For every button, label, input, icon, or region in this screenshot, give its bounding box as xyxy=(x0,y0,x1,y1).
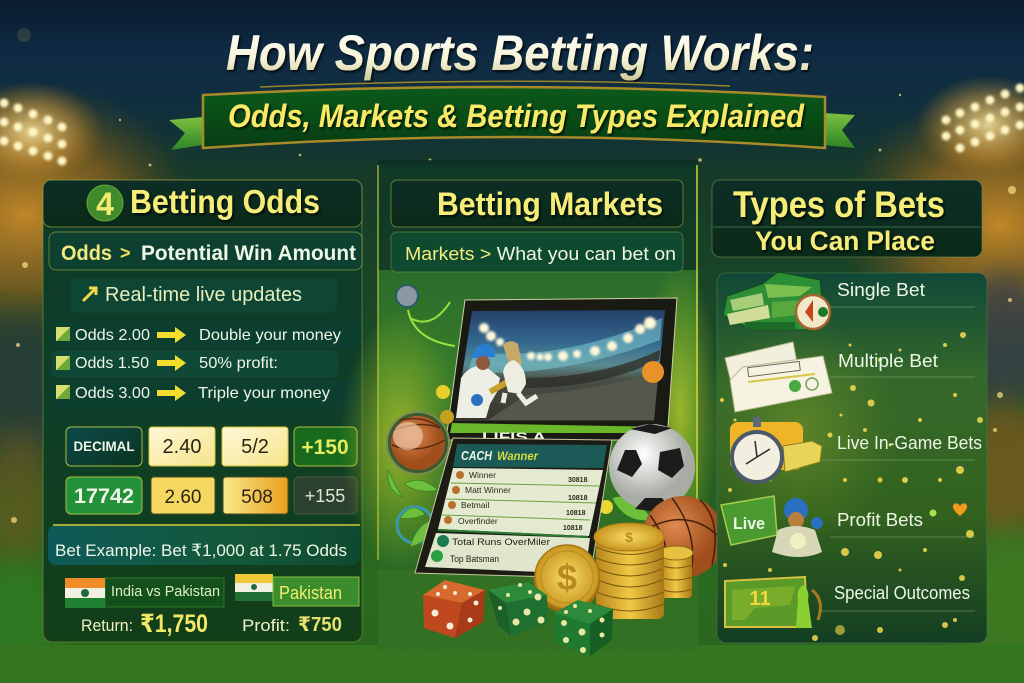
bet type: live in-game bets: Live In-Game Bets xyxy=(837,433,982,453)
ribbon banner with subtitle xyxy=(169,81,855,150)
odds row 2.00: Odds 2.00 xyxy=(75,327,150,344)
odds chips top row: 2.40 xyxy=(163,436,201,458)
red die xyxy=(423,580,485,638)
odds chips top row: +150 xyxy=(301,436,349,459)
basketball xyxy=(642,496,724,578)
match label Pakistan: Pakistan xyxy=(279,583,342,603)
odds row 2.00 xyxy=(52,322,358,348)
green die front xyxy=(554,600,613,656)
yellow dots and blue ring xyxy=(397,385,613,543)
odds chips top row xyxy=(66,427,357,466)
betting slip tablet: Top Batsman xyxy=(450,554,499,565)
return value xyxy=(81,610,208,638)
bet example xyxy=(48,525,360,565)
match label India vs Pakistan: India vs Pakistan xyxy=(111,584,220,600)
live updates row xyxy=(70,278,337,313)
odds chips bottom row xyxy=(66,477,357,514)
bet example: Bet Example: Bet ₹1,000 at 1.75 Odds xyxy=(55,541,347,560)
odds chips bottom row: 2.60 xyxy=(165,487,201,508)
odds chips bottom row: 508 xyxy=(241,487,273,508)
profit value xyxy=(242,614,342,636)
odds definition row: Potential Win Amount xyxy=(141,242,356,265)
types heading: Types of Bets xyxy=(733,184,945,225)
title: How Sports Betting Works: xyxy=(226,25,814,81)
green die xyxy=(488,582,548,636)
panel: types of bets xyxy=(700,180,987,643)
betting slip tablet: 10818 xyxy=(566,510,586,517)
betting slip tablet: Matt Winner xyxy=(465,485,511,495)
return value: Return: xyxy=(81,616,133,635)
odds chips bottom row: +155 xyxy=(305,486,345,506)
betting slip tablet: Winner xyxy=(469,470,496,480)
bet type: single bet xyxy=(723,272,975,330)
betting slip tablet: 10818 xyxy=(563,525,583,532)
betting slip tablet: Wanner xyxy=(497,449,539,463)
profit value: ₹750 xyxy=(298,614,342,636)
markets definition row: Markets > What you can bet on xyxy=(405,244,676,264)
panel: betting markets xyxy=(340,160,724,656)
soccer ball xyxy=(609,424,695,511)
bet type: special outcomes: 11 xyxy=(749,588,771,610)
profit value: Profit: xyxy=(242,616,290,635)
big dollar coin xyxy=(534,545,600,613)
bet type: profit bets: Profit Bets xyxy=(837,510,923,530)
emoji badge xyxy=(642,361,664,383)
bet type: multiple bet xyxy=(725,342,975,412)
stadium lights left xyxy=(0,82,104,182)
odds row 3.00 xyxy=(52,380,358,408)
odds row 2.00: Double your money xyxy=(199,327,341,344)
types heading xyxy=(712,180,982,257)
betting slip tablet: CACH xyxy=(461,448,492,463)
odds heading xyxy=(43,180,362,227)
clipped screen caption: LIFIS A xyxy=(482,430,547,444)
big dollar coin: $ xyxy=(557,557,577,598)
odds heading: Betting Odds xyxy=(130,183,320,220)
ribbon banner with subtitle: Odds, Markets & Betting Types Explained xyxy=(228,98,805,134)
small basketball xyxy=(387,412,449,474)
icon: microphone with vine xyxy=(396,285,455,346)
panel: betting odds xyxy=(43,180,362,642)
odds row 1.50: Odds 1.50 xyxy=(75,355,149,372)
leaves xyxy=(388,470,652,547)
live updates row: Real-time live updates xyxy=(105,284,302,306)
bet type: profit bets xyxy=(721,496,975,557)
tablet with live match xyxy=(446,298,677,444)
odds row 3.00: Odds 3.00 xyxy=(75,385,150,402)
match label India vs Pakistan xyxy=(65,578,224,608)
stadium lights right xyxy=(916,75,1024,175)
betting slip tablet xyxy=(415,438,612,578)
bet type: live in-game bets xyxy=(730,417,982,482)
cricket players xyxy=(456,341,537,418)
odds row 1.50: 50% profit: xyxy=(199,355,278,372)
markets heading: Betting Markets xyxy=(437,186,663,222)
betting slip tablet: 10818 xyxy=(568,495,588,502)
betting slip tablet: Overfinder xyxy=(458,516,498,526)
odds chips bottom row: 17742 xyxy=(74,485,134,508)
bet type: special outcomes xyxy=(725,577,975,628)
coin stack xyxy=(594,523,664,619)
odds row 3.00: Triple your money xyxy=(198,385,330,402)
odds heading: 4 xyxy=(96,186,114,222)
bet type: multiple bet: Multiple Bet xyxy=(838,351,938,371)
return value: ₹1,750 xyxy=(140,610,208,638)
odds chips top row: DECIMAL xyxy=(74,438,135,454)
betting slip tablet: 30818 xyxy=(568,477,588,484)
types heading: You Can Place xyxy=(755,226,935,256)
odds chips top row: 5/2 xyxy=(241,436,269,458)
odds definition row: Odds xyxy=(61,242,112,265)
coin stack: $ xyxy=(625,529,633,545)
markets definition row xyxy=(391,232,683,272)
betting slip tablet: Total Runs OverMiler xyxy=(452,537,550,547)
bet type: single bet: Single Bet xyxy=(837,280,925,300)
odds definition row xyxy=(49,232,362,270)
bet type: profit bets: Live xyxy=(733,514,765,533)
bet type: special outcomes: Special Outcomes xyxy=(834,583,970,603)
small coin stack xyxy=(659,546,693,598)
markets heading xyxy=(391,180,683,227)
betting slip tablet: Betmail xyxy=(461,500,489,510)
odds row 1.50 xyxy=(52,351,338,377)
match label Pakistan xyxy=(235,574,359,606)
odds definition row: > xyxy=(120,243,131,263)
